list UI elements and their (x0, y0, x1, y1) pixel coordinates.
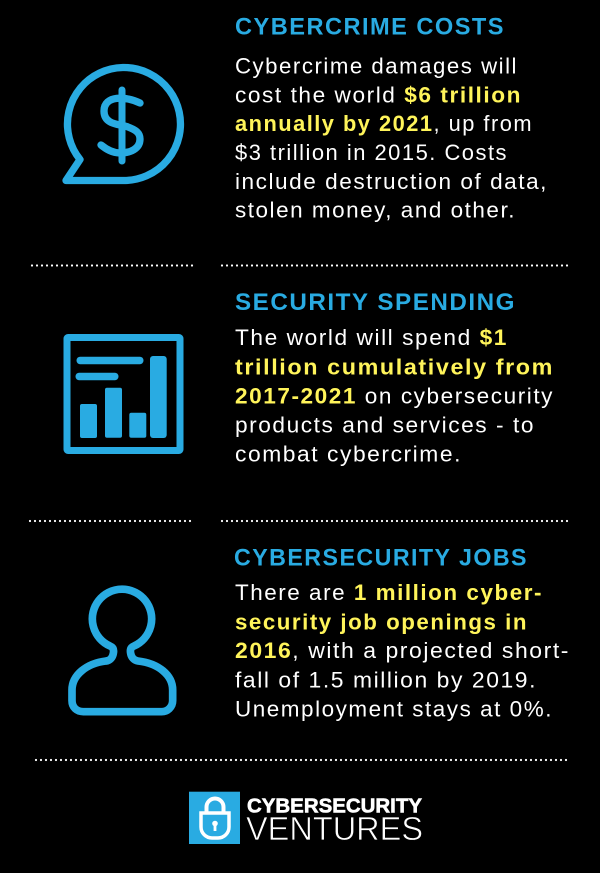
text block: cybersecurity jobs: There are 1 million cyber- (235, 580, 543, 605)
text block: cybersecurity jobs: fall of 1.5 million by 2019. (235, 668, 537, 693)
icon: bar chart (67, 338, 180, 450)
text block: security spending: The world will spend $1 (235, 325, 508, 350)
wordmark: cybersecurity: CYBERSECURITY (247, 796, 423, 818)
text block: cybersecurity jobs: Unemployment stays at 0%. (235, 697, 553, 722)
heading: cybercrime costs: CYBERCRIME COSTS (235, 13, 505, 40)
text block: security spending: trillion cumulatively from (235, 354, 554, 380)
icon: person outline (72, 589, 173, 712)
wordmark: ventures: VENTURES (246, 811, 423, 848)
icon: dollar speech bubble (66, 68, 180, 181)
text block: cybercrime costs (235, 53, 548, 223)
text block: cybersecurity jobs: security job openings in (235, 610, 528, 634)
text block: cybercrime costs: cost the world $6 trillion (235, 82, 522, 107)
text block: cybercrime costs: annually by 2021, up from (235, 111, 533, 136)
text block: cybersecurity jobs (235, 580, 570, 722)
panel: cybercrime costs (66, 13, 548, 223)
heading: security spending: SECURITY SPENDING (235, 289, 516, 316)
text block: cybercrime costs: Cybercrime damages will (235, 53, 518, 78)
text block: cybercrime costs: include destruction of data, (235, 169, 548, 194)
text block: security spending: 2017-2021 on cybersecurity (235, 383, 554, 408)
text block: cybercrime costs: $3 trillion in 2015. Costs (235, 140, 508, 165)
text block: security spending: products and services - to (235, 413, 535, 438)
text block: security spending: combat cybercrime. (235, 442, 462, 467)
text block: cybersecurity jobs: 2016, with a projected short- (235, 638, 570, 663)
text block: cybercrime costs: stolen money, and other. (235, 198, 516, 223)
text block: security spending (235, 325, 554, 467)
panel: cybersecurity jobs (72, 545, 570, 722)
panel: security spending (67, 289, 554, 467)
logo: cybersecurity ventures (189, 792, 423, 848)
icon: padlock (189, 792, 240, 844)
heading: cybersecurity jobs: CYBERSECURITY JOBS (234, 545, 528, 572)
